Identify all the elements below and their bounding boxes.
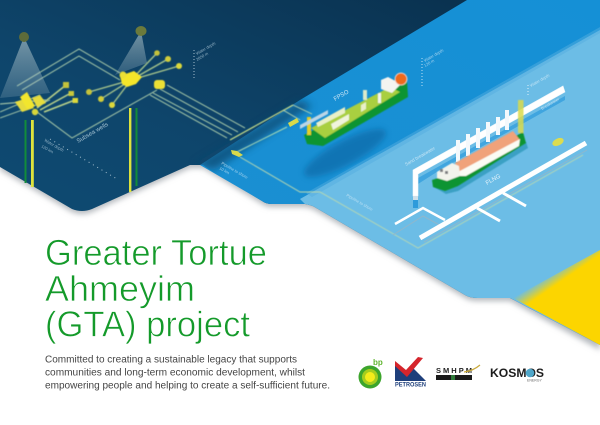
description text: communities and long-term economic development, whilst bbox=[45, 368, 305, 378]
FLNG shadow bbox=[434, 142, 528, 194]
label: water depth deep: Water depth bbox=[195, 41, 216, 56]
breakwater jetty upper bbox=[413, 86, 565, 208]
label: breakwater: Sand breakwater bbox=[404, 145, 436, 167]
description text: Committed to creating a sustainable legacy that supports bbox=[45, 354, 297, 366]
small yellow marker bbox=[551, 136, 565, 148]
logo: Petrosen: PETROSEN bbox=[395, 382, 426, 388]
subsea pipelines bbox=[0, 49, 583, 248]
FLNG vessel bbox=[432, 100, 526, 191]
label: subsea wells: Subsea wells bbox=[76, 122, 110, 145]
logo: bp bbox=[358, 358, 383, 388]
description text bbox=[45, 354, 330, 392]
label: pipeline distance: Water depth bbox=[44, 138, 65, 153]
label: pipeline distance: 120 km bbox=[40, 144, 55, 155]
title: (GTA) project bbox=[45, 304, 250, 344]
subsea wells left cluster bbox=[15, 82, 78, 115]
pipeline junction markers bbox=[231, 118, 299, 157]
label: upper breakwater note: Water depth bbox=[529, 73, 550, 88]
label: water depth shallow bbox=[422, 48, 444, 87]
FLNG berth towers bbox=[456, 110, 509, 162]
logo: Kosmos Energy: KOSMOS bbox=[490, 368, 544, 380]
label: upper breakwater note: Breakwater bbox=[540, 96, 561, 111]
FPSO vessel bbox=[300, 73, 408, 146]
logo: Kosmos Energy: ENERGY bbox=[527, 378, 542, 382]
label: FLNG: FLNG bbox=[485, 173, 502, 187]
logo: SMHPM bbox=[436, 365, 480, 380]
label: FPSO: FPSO bbox=[333, 89, 350, 103]
logo: Petrosen bbox=[395, 357, 426, 388]
title: Ahmeyim bbox=[45, 268, 195, 309]
title: Greater Tortue bbox=[45, 232, 267, 273]
title bbox=[45, 232, 267, 344]
FPSO shadow bbox=[299, 121, 391, 185]
logo: bp: bp bbox=[373, 358, 383, 367]
label: upper breakwater note bbox=[528, 73, 561, 111]
label: pipeline distance bbox=[40, 138, 117, 179]
label: water depth shallow: 120 m bbox=[423, 58, 436, 68]
logo: SMHPM: SMHPM bbox=[436, 366, 472, 375]
label: water depth shallow: Water depth bbox=[423, 48, 444, 63]
description text: empowering people and helping to create a self-sufficient future. bbox=[45, 380, 330, 392]
breakwater jetty lower bbox=[393, 143, 587, 242]
well risers bbox=[24, 108, 138, 192]
label: water depth deep bbox=[194, 41, 216, 78]
seabed light cone left bbox=[0, 32, 50, 98]
label: shallow pipeline: Pipeline to shore bbox=[220, 161, 249, 180]
seabed light cone right bbox=[115, 26, 147, 75]
subsea wells right cluster bbox=[86, 50, 182, 108]
label: shore pipeline: Pipeline to shore bbox=[346, 193, 374, 212]
label: shallow pipeline: 10 km bbox=[218, 166, 231, 176]
label: water depth deep: 2850 m bbox=[195, 51, 210, 62]
